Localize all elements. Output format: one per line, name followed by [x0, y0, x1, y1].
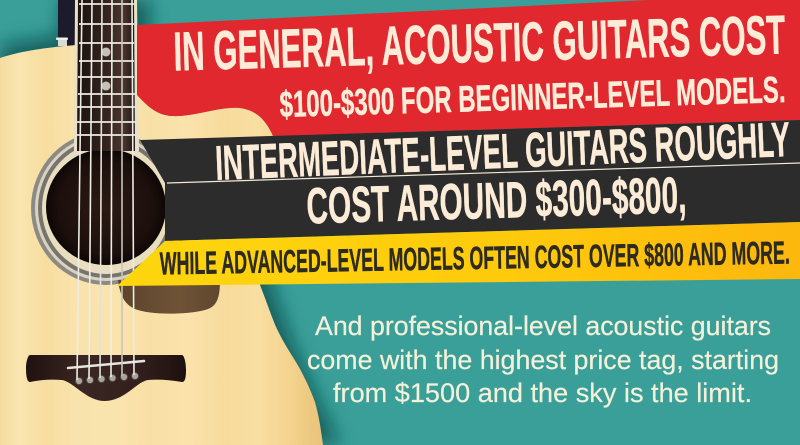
sound hole rings	[31, 131, 181, 285]
pickguard	[118, 280, 220, 314]
text block: professional-level guitars	[307, 311, 779, 408]
strap button	[56, 38, 68, 46]
saddle	[68, 361, 144, 368]
neck	[74, 0, 139, 151]
text block: professional-level guitars: come with the highest price tag, starting	[307, 345, 779, 375]
panel: red banner	[137, 0, 800, 136]
text block: professional-level guitars: from $1500 and the sky is the limit.	[333, 378, 752, 408]
headstock shadow strip	[58, 0, 77, 46]
strings	[77, 0, 134, 380]
sound hole	[46, 149, 166, 265]
frets	[77, 4, 135, 135]
divider line	[167, 163, 800, 183]
guitar shadow on background	[0, 0, 340, 445]
panel: yellow banner	[117, 222, 800, 286]
guitar	[0, 0, 323, 445]
guitar body	[0, 45, 323, 445]
bridge	[26, 355, 186, 401]
panel: dark banner	[140, 113, 800, 241]
fret markers	[102, 48, 110, 90]
bridge pins	[75, 372, 139, 385]
text block: professional-level guitars: And professional-level acoustic guitars	[315, 311, 771, 341]
